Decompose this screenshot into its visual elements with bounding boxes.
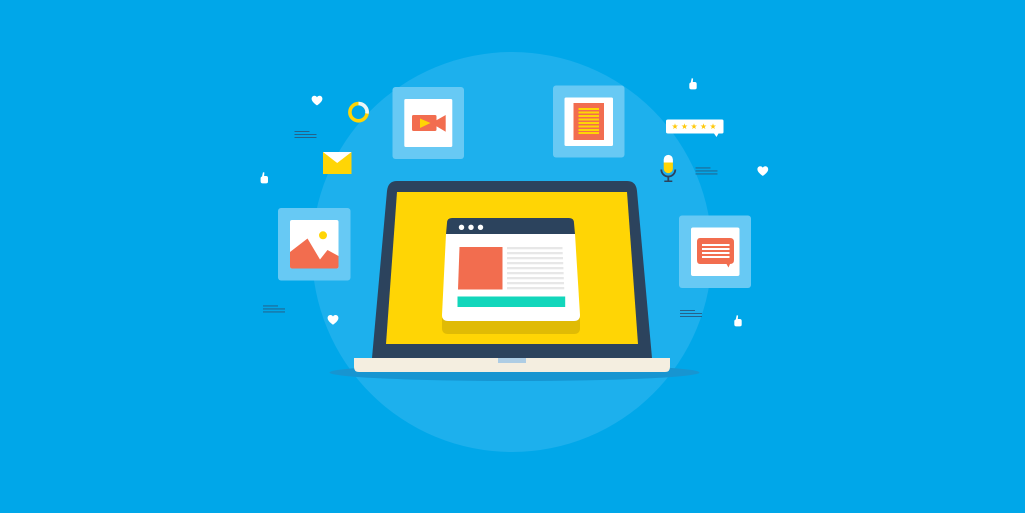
laptop xyxy=(354,181,670,372)
rating stars: ★ xyxy=(700,122,707,131)
icon: document xyxy=(574,103,604,140)
icon: heart right xyxy=(757,166,768,176)
laptop notch xyxy=(498,358,526,363)
icon: heart bottom left xyxy=(328,315,338,325)
laptop screen bezel xyxy=(372,181,652,358)
teal bar xyxy=(458,296,565,307)
message card xyxy=(679,216,751,288)
window body xyxy=(442,234,580,321)
icon: chat bubble xyxy=(697,238,734,268)
icon: landscape picture xyxy=(290,238,338,268)
document card xyxy=(553,86,624,158)
image card xyxy=(278,208,350,280)
icon: sun xyxy=(319,231,327,239)
icon: microphone xyxy=(661,155,675,182)
rating stars xyxy=(672,122,716,131)
laptop shadow xyxy=(330,364,700,381)
decorative lines bottom left xyxy=(263,306,285,312)
decorative lines top left xyxy=(294,131,316,138)
window shadow xyxy=(442,318,580,334)
icon: donut chart xyxy=(350,104,367,121)
rating stars: ★ xyxy=(672,122,678,131)
icon: heart top left xyxy=(312,96,322,105)
rating stars: ★ xyxy=(690,122,698,131)
icon: rating speech bubble xyxy=(666,120,724,137)
window title bar xyxy=(446,218,575,234)
icon: thumb top right xyxy=(689,78,697,89)
decorative lines bottom right xyxy=(680,310,702,317)
laptop base xyxy=(354,358,670,372)
icon: thumb bottom right xyxy=(734,315,742,326)
icon: video camera xyxy=(412,115,446,132)
text lines xyxy=(507,247,564,289)
decorative lines right xyxy=(696,168,718,174)
video card xyxy=(392,87,464,159)
orange image block xyxy=(458,247,502,290)
window dots xyxy=(459,225,483,230)
icon: envelope xyxy=(323,152,352,174)
rating stars: ★ xyxy=(710,122,716,131)
background circle xyxy=(312,52,712,452)
icon: thumb left xyxy=(261,172,268,183)
laptop yellow screen xyxy=(386,192,638,344)
rating stars: ★ xyxy=(681,122,688,131)
browser window xyxy=(442,218,580,334)
